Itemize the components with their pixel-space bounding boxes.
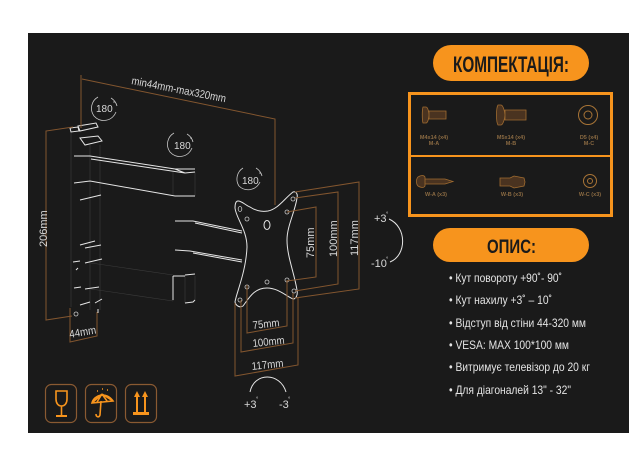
dimensions right of plate: 75mm	[305, 227, 317, 258]
rotation mark 180 top left: °	[113, 101, 115, 107]
panel: hardware kit	[410, 94, 612, 216]
specification list: • Кут повороту +90˚- 90˚	[449, 271, 562, 285]
dimensions below plate: 100mm	[252, 335, 285, 350]
tilt arc +3 -10: °	[386, 212, 389, 218]
screw M-A: M4x14 (x4)	[420, 135, 448, 141]
dimension: arm extension min44mm-max320mm: min44mm-max320mm	[130, 75, 227, 105]
screw M-A: M-A	[429, 141, 439, 147]
dimension: height 206mm: 206mm	[38, 210, 50, 247]
tilt arc +3 -10: -10	[371, 258, 387, 270]
screw W-A	[416, 176, 453, 198]
faint guide lines	[71, 132, 195, 310]
swivel arc +3 -3: +3	[244, 399, 257, 411]
rotation mark 180 middle: 180	[174, 141, 191, 152]
tilt arc +3 -10: °	[386, 257, 389, 263]
heading pill: contents: КОМПЕКТАЦІЯ:	[453, 52, 569, 77]
dimensions right of plate: 117mm	[349, 220, 361, 256]
rotation mark 180 by plate	[237, 168, 262, 190]
tilt arc +3 -10: +3	[374, 213, 387, 225]
dimension: height 206mm	[38, 127, 73, 320]
specification list: • VESA: MAX 100*100 мм	[449, 338, 569, 352]
dimension: arm extension min44mm-max320mm	[81, 75, 275, 205]
washer M-C: M-C	[584, 141, 594, 147]
mounting plate	[235, 192, 297, 307]
dimensions below plate: 75mm	[252, 317, 280, 332]
dimension: depth 44mm: 44mm	[68, 324, 97, 341]
tilt arc +3 -10	[371, 212, 403, 270]
rotation mark 180 middle	[167, 133, 193, 156]
washer W-C	[579, 174, 601, 198]
screw M-B	[496, 105, 526, 147]
screw M-B: M5x14 (x4)	[497, 135, 525, 141]
specification list	[449, 271, 591, 397]
swivel arc +3 -3	[244, 377, 291, 411]
lower arm end block	[173, 274, 195, 303]
screw W-A: W-A (x3)	[425, 192, 447, 198]
dimensions below plate: 117mm	[251, 358, 284, 373]
middle arm	[175, 221, 242, 262]
rotation mark 180 top left	[91, 97, 117, 120]
washer M-C: D5 (x4)	[580, 135, 598, 141]
swivel arc +3 -3: -3	[279, 399, 289, 411]
bracket lower clips	[73, 241, 102, 313]
washer M-C	[578, 106, 598, 147]
specification list: • Для діагоналей 13" - 32"	[449, 383, 571, 397]
heading pill: description: ОПИС:	[487, 237, 536, 258]
specification list: • Витримує телевізор до 20 кг	[449, 360, 591, 374]
swivel arc +3 -3: °	[288, 397, 291, 403]
specification list: • Відступ від стіни 44-320 мм	[449, 316, 586, 330]
specification list: • Кут нахилу +3˚ – 10˚	[449, 293, 552, 307]
heading pill: description	[433, 228, 589, 262]
rotation mark 180 top left: 180	[96, 104, 113, 115]
icon: keep dry umbrella	[86, 384, 116, 422]
screw M-B: M-B	[506, 141, 516, 147]
rotation mark 180 middle: °	[190, 137, 192, 143]
dimensions right of plate	[287, 182, 361, 298]
wall plug W-B	[500, 176, 525, 198]
rotation mark 180 by plate: 180	[242, 176, 259, 187]
dimensions right of plate: 100mm	[328, 220, 340, 257]
swivel arc +3 -3: °	[256, 397, 259, 403]
icon: this way up arrows	[126, 384, 156, 422]
dimension: depth 44mm	[68, 308, 97, 342]
bracket bottom hole	[74, 312, 78, 316]
dimensions below plate	[235, 280, 298, 376]
icon: fragile glass	[46, 384, 76, 422]
screw M-A	[420, 107, 448, 147]
wall plug W-B: W-B (x3)	[501, 192, 523, 198]
washer W-C: W-C (x3)	[579, 192, 601, 198]
upper arm	[74, 156, 195, 200]
heading pill: contents	[433, 45, 589, 81]
wall bracket and arms drawing	[70, 123, 242, 316]
wall plate top cap	[70, 123, 102, 145]
rotation mark 180 by plate: °	[259, 172, 261, 178]
